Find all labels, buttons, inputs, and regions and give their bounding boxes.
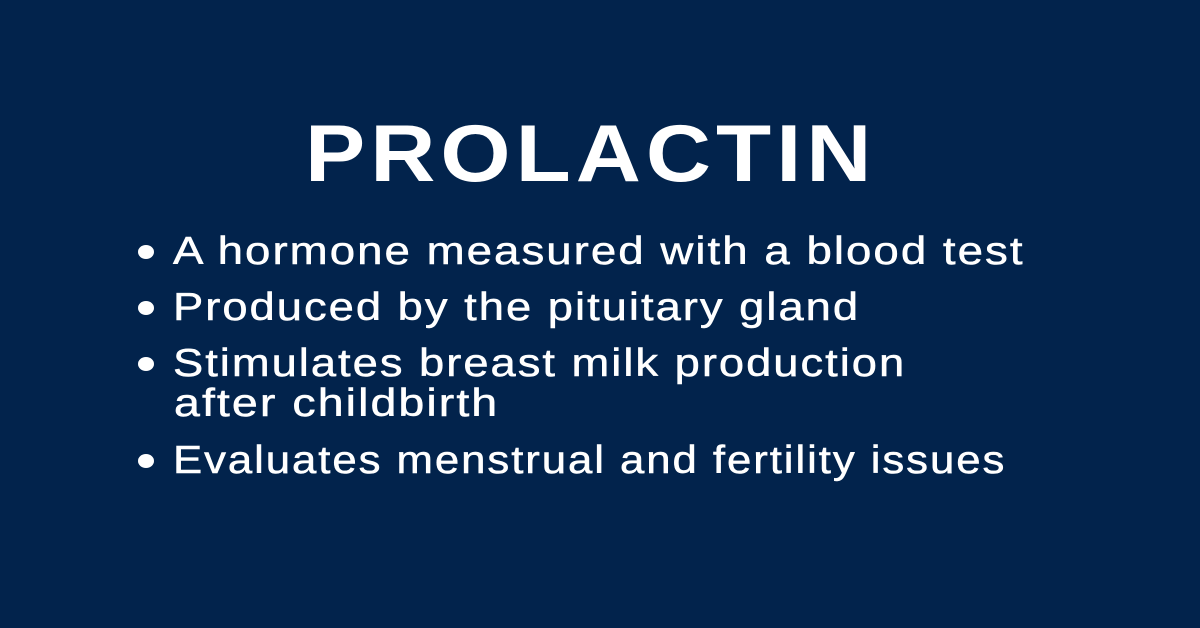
- title: PROLACTIN: [305, 109, 876, 199]
- bullet 2: Produced by the pituitary gland: [173, 286, 860, 329]
- bullet 3: after childbirth: [174, 382, 499, 425]
- bullet 3: Stimulates breast milk production: [173, 342, 906, 385]
- bullet 1: A hormone measured with a blood test: [173, 230, 1025, 273]
- bullet list: [138, 230, 1025, 482]
- bullet 4: Evaluates menstrual and fertility issues: [173, 439, 1006, 482]
- bullet 3: [138, 342, 906, 425]
